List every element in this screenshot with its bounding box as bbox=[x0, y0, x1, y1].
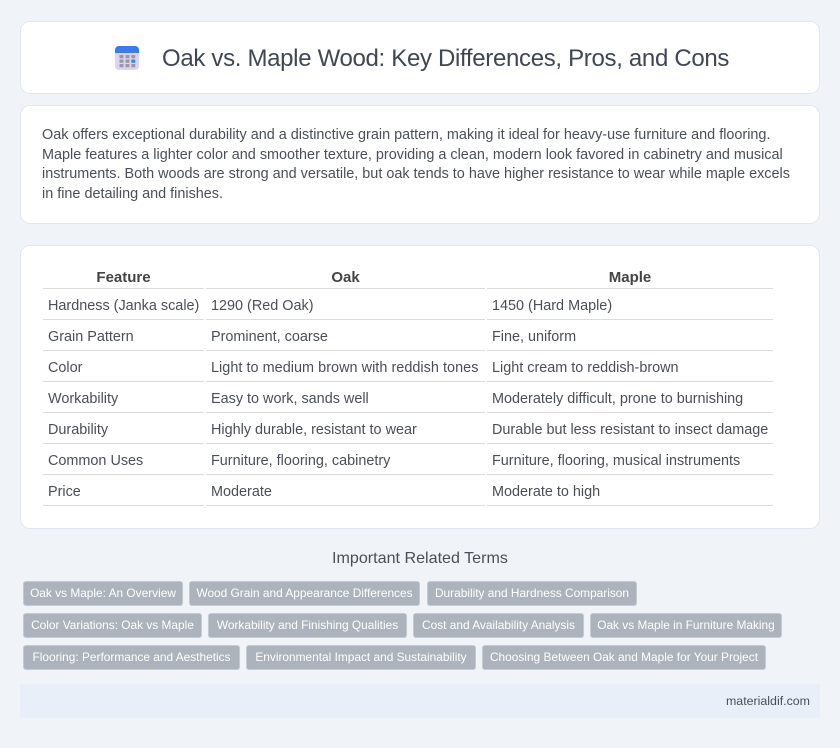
text block: introduction: in fine detailing and finishes. bbox=[42, 186, 223, 202]
text block: introduction: instruments. Both woods are strong and versatile, but oak tends to have higher resistance to wear while maple excels bbox=[42, 166, 790, 182]
table row: color bbox=[48, 360, 679, 376]
tag: Color Variations: Oak vs Maple bbox=[31, 618, 194, 632]
table row: hardness: Hardness (Janka scale) bbox=[48, 298, 199, 314]
panel: comparison table bbox=[20, 245, 820, 529]
tag bbox=[23, 613, 202, 638]
table row: common uses: Common Uses bbox=[48, 453, 143, 469]
table header: Maple bbox=[609, 269, 651, 286]
table row: color: Color bbox=[48, 360, 82, 376]
text block: introduction: Oak offers exceptional durability and a distinctive grain pattern, making it ideal for heavy-use furniture and flooring. bbox=[42, 127, 770, 143]
table row: grain pattern bbox=[48, 329, 576, 345]
table row: color: Light cream to reddish-brown bbox=[492, 360, 679, 376]
table header: Oak bbox=[331, 269, 360, 286]
tag bbox=[208, 613, 407, 638]
text block: introduction: Maple features a lighter color and smoother texture, providing a clean, modern look favored in cabinetry and musical bbox=[42, 147, 783, 163]
table row: workability: Easy to work, sands well bbox=[211, 391, 369, 407]
table row: price: Moderate to high bbox=[492, 484, 600, 500]
table row: durability: Highly durable, resistant to wear bbox=[211, 422, 417, 438]
tag: Cost and Availability Analysis bbox=[422, 618, 575, 632]
table row: workability bbox=[48, 391, 743, 407]
tag: Durability and Hardness Comparison bbox=[435, 586, 629, 600]
table row: common uses: Furniture, flooring, musical instruments bbox=[492, 453, 740, 469]
table header bbox=[96, 269, 651, 286]
tag: Choosing Between Oak and Maple for Your Project bbox=[490, 650, 758, 664]
tag bbox=[246, 645, 476, 670]
panel: introduction bbox=[20, 105, 820, 224]
table row: workability: Moderately difficult, prone to burnishing bbox=[492, 391, 743, 407]
table row: durability: Durability bbox=[48, 422, 108, 438]
heading: related terms: Important Related Terms bbox=[332, 549, 508, 567]
tag bbox=[189, 581, 420, 606]
table row: durability bbox=[48, 422, 768, 438]
footer bar bbox=[20, 684, 820, 718]
table row: hardness: 1290 (Red Oak) bbox=[211, 298, 314, 314]
tag: Oak vs Maple in Furniture Making bbox=[597, 618, 775, 632]
title: Oak vs. Maple Wood: Key Differences, Pros, and Cons bbox=[162, 45, 729, 72]
table row: grain pattern: Grain Pattern bbox=[48, 329, 134, 345]
table row: grain pattern: Prominent, coarse bbox=[211, 329, 328, 345]
tag: Environmental Impact and Sustainability bbox=[255, 650, 467, 664]
tag bbox=[413, 613, 584, 638]
tag: Wood Grain and Appearance Differences bbox=[196, 586, 413, 600]
tag bbox=[482, 645, 766, 670]
table header: Feature bbox=[96, 269, 151, 286]
table row: workability: Workability bbox=[48, 391, 118, 407]
tag bbox=[23, 581, 183, 606]
icon: calendar bbox=[115, 46, 139, 70]
text block: introduction bbox=[42, 127, 790, 202]
table row: grain pattern: Fine, uniform bbox=[492, 329, 576, 345]
tag: Workability and Finishing Qualities bbox=[217, 618, 398, 632]
tag bbox=[23, 645, 240, 670]
tag list: related terms bbox=[23, 581, 782, 670]
tag: Flooring: Performance and Aesthetics bbox=[32, 650, 231, 664]
footer source text: materialdif.com bbox=[726, 694, 810, 708]
panel: header bbox=[20, 21, 820, 94]
tag bbox=[427, 581, 637, 606]
table row: price: Price bbox=[48, 484, 81, 500]
table row: price bbox=[48, 484, 600, 500]
tag: Oak vs Maple: An Overview bbox=[30, 586, 176, 600]
table row: durability: Durable but less resistant to insect damage bbox=[492, 422, 768, 438]
table row: color: Light to medium brown with reddish tones bbox=[211, 360, 478, 376]
table row: hardness bbox=[48, 298, 612, 314]
table row: common uses: Furniture, flooring, cabinetry bbox=[211, 453, 390, 469]
table row: price: Moderate bbox=[211, 484, 272, 500]
table row: hardness: 1450 (Hard Maple) bbox=[492, 298, 612, 314]
tag bbox=[590, 613, 782, 638]
table row: common uses bbox=[48, 453, 740, 469]
